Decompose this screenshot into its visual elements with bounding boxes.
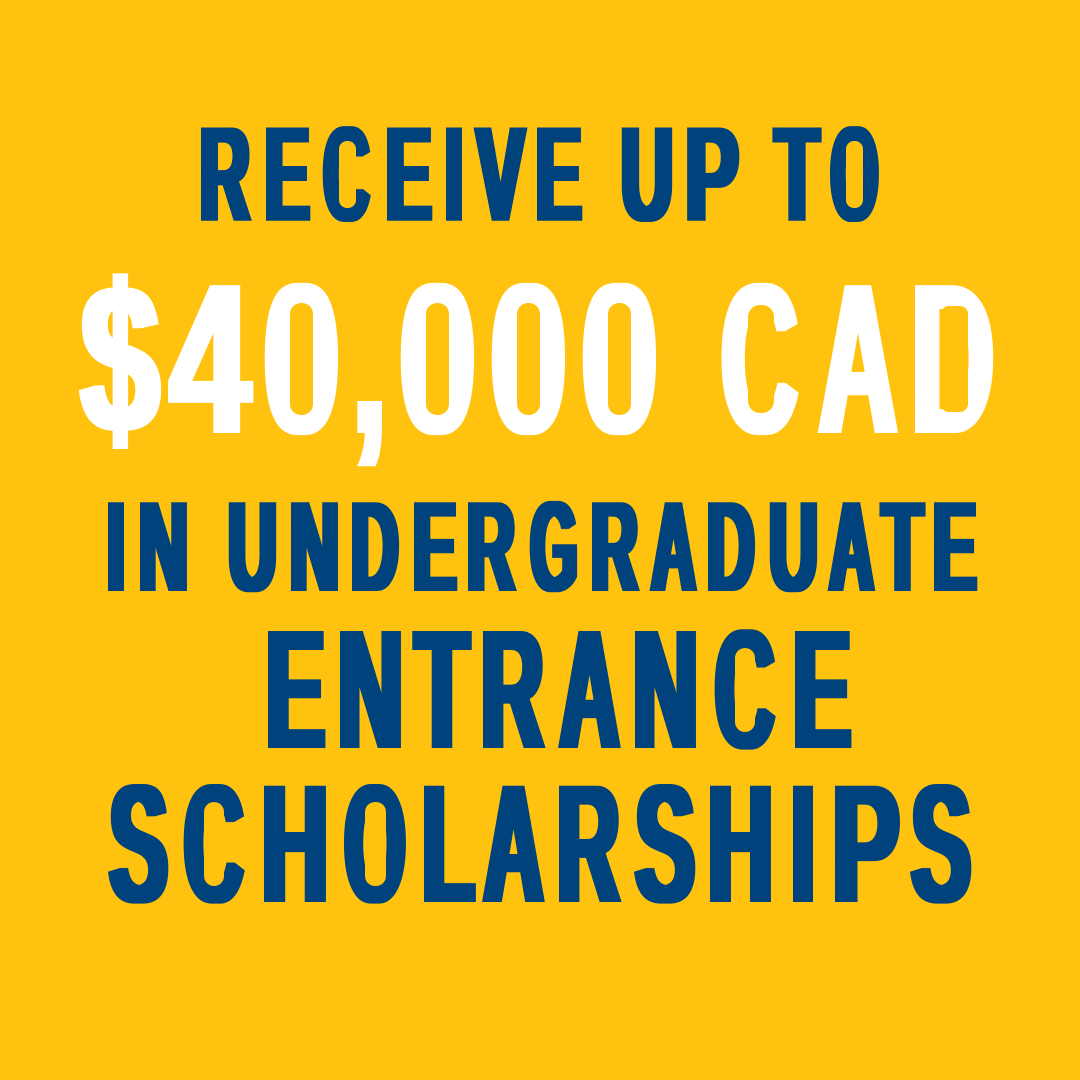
headline line: receive up to: E [536, 98, 582, 250]
headline amount: $40,000 CAD: 0 [581, 238, 658, 479]
infographic canvas: O [831, 98, 878, 250]
headline line: in undergraduate: I [107, 475, 125, 619]
headline line: receive up to: C [324, 98, 369, 250]
headline line: in undergraduate: A [830, 475, 874, 619]
headline line: in undergraduate: R [591, 475, 638, 619]
headline line: in undergraduate: E [413, 475, 456, 619]
headline line: in undergraduate: U [228, 475, 277, 619]
headline line: receive up to: V [476, 98, 524, 250]
headline line: entrance: N [633, 595, 698, 785]
headline line: in undergraduate: E [933, 475, 976, 619]
headline line: entrance: E [266, 595, 325, 785]
headline line: receive up to: E [386, 98, 432, 250]
headline line: in undergraduate: D [351, 475, 398, 619]
headline line: receive up to: P [685, 98, 737, 250]
headline line: in undergraduate: D [707, 475, 754, 619]
headline line: scholarships: I [791, 749, 815, 938]
headline amount: $40,000 CAD: 4 [170, 238, 250, 479]
headline amount: $40,000 CAD: 0 [263, 238, 340, 479]
headline line: scholarships: A [484, 749, 543, 938]
headline line: receive up to: T [775, 98, 819, 250]
headline line: entrance: R [481, 595, 543, 785]
headline line: in undergraduate: N [290, 475, 339, 619]
headline line: scholarships: H [708, 749, 773, 938]
headline line: receive up to: U [621, 98, 673, 250]
headline line: entrance: N [338, 595, 403, 785]
headline line: entrance: C [715, 595, 774, 785]
headline amount: $40,000 CAD: C [721, 238, 798, 479]
headline line: receive up to: E [265, 98, 309, 250]
headline line: in undergraduate: G [531, 475, 577, 619]
headline line: in undergraduate: R [467, 475, 515, 619]
headline line: scholarships: R [557, 749, 619, 938]
headline line: scholarships: C [184, 749, 243, 938]
headline line: in undergraduate: T [882, 475, 923, 619]
headline amount: $40,000 CAD: 0 [399, 238, 476, 479]
headline line: in undergraduate: U [769, 475, 818, 619]
headline line: entrance: T [415, 595, 469, 785]
headline line: scholarships: L [422, 749, 475, 938]
headline amount: $40,000 CAD: , [353, 238, 386, 479]
headline amount: $40,000 CAD: A [819, 238, 897, 479]
headline line: scholarships: O [345, 749, 405, 938]
headline line: entrance: E [793, 595, 851, 785]
headline line: scholarships: S [109, 749, 168, 938]
headline amount: $40,000 CAD: 0 [490, 238, 567, 479]
headline line: scholarships: H [262, 749, 328, 938]
headline amount: $40,000 CAD: $ [81, 238, 159, 479]
headline line: scholarships: S [911, 749, 971, 938]
headline amount: $40,000 CAD: D [911, 238, 994, 479]
headline line: in undergraduate: A [652, 475, 696, 619]
headline line: scholarships: S [635, 749, 695, 938]
headline line: in undergraduate: N [139, 475, 188, 619]
headline line: entrance: A [560, 595, 619, 785]
headline line: scholarships: P [832, 749, 899, 938]
headline line: receive up to: I [445, 98, 463, 250]
headline line: receive up to: R [200, 98, 250, 250]
